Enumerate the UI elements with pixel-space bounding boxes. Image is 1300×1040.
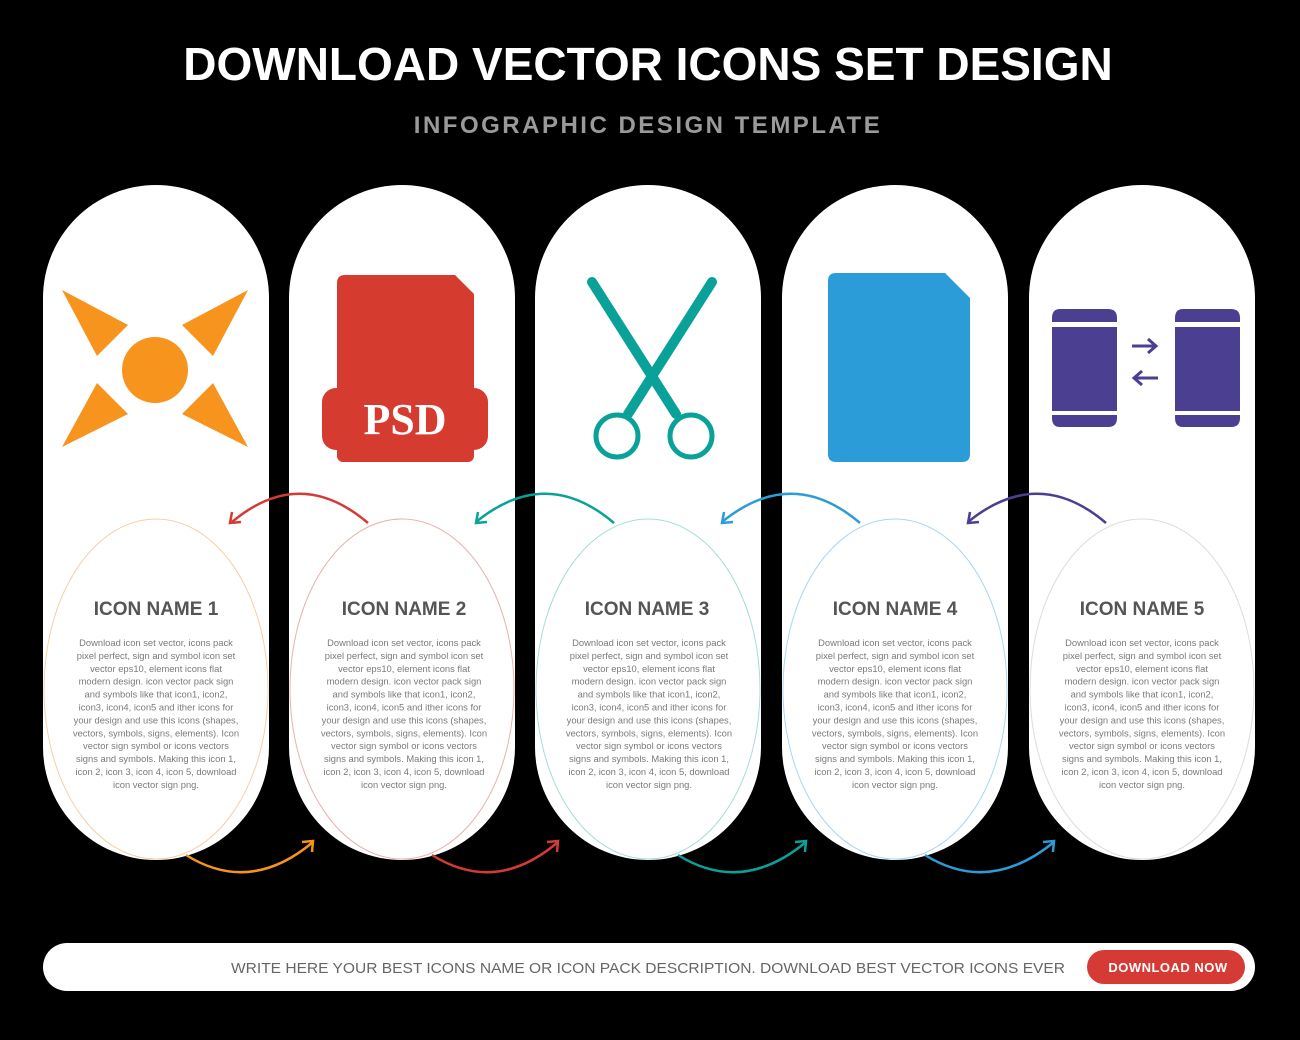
text block 1: your design and use this icons (shapes, [74, 714, 238, 725]
text block 2: ICON NAME 2 [342, 599, 466, 620]
text block 4: and symbols like that icon1, icon2, [824, 689, 966, 700]
text block 3: vector sign symbol or icons vectors [576, 740, 722, 751]
text block 2: pixel perfect, sign and symbol icon set [325, 650, 484, 661]
text block 1: vector sign symbol or icons vectors [83, 740, 229, 751]
panel: card 3 [535, 185, 761, 860]
text block 4 [812, 599, 978, 790]
text block 4: signs and symbols. Making this icon 1, [815, 753, 975, 764]
text block 3: vectors, symbols, signs, elements). Icon [566, 727, 732, 738]
text block 5: and symbols like that icon1, icon2, [1071, 689, 1213, 700]
text block 4: pixel perfect, sign and symbol icon set [816, 650, 975, 661]
icon: scissors [592, 282, 712, 457]
text block 2: icon3, icon4, icon5 and ither icons for [327, 702, 481, 712]
arrow: top red 2 to 1 [230, 494, 368, 523]
text block 5: icon 2, icon 3, icon 4, icon 5, download [1061, 766, 1223, 777]
icon: PSD file [322, 275, 488, 462]
text block 2: vector eps10, element icons flat [338, 663, 470, 674]
text block 1: vectors, symbols, signs, elements). Icon [73, 727, 239, 738]
text block 1: and symbols like that icon1, icon2, [85, 689, 227, 700]
ellipse outline 4 [783, 519, 1007, 859]
text block 5: vector eps10, element icons flat [1076, 663, 1208, 674]
subtitle: INFOGRAPHIC DESIGN TEMPLATE [414, 112, 882, 139]
text block 2 [321, 599, 487, 790]
ellipse outline 5 [1030, 519, 1254, 859]
text block 2: modern design. icon vector pack sign [327, 676, 481, 687]
text block 1 [73, 599, 239, 790]
text block 5: icon3, icon4, icon5 and ither icons for [1065, 702, 1219, 712]
footer bar [43, 943, 1255, 991]
text block 3: vector eps10, element icons flat [583, 663, 715, 674]
text block 1: pixel perfect, sign and symbol icon set [77, 650, 236, 661]
footer text: WRITE HERE YOUR BEST ICONS NAME OR ICON PACK DESCRIPTION. DOWNLOAD BEST VECTOR ICONS EVER [231, 960, 1065, 977]
text block 5 [1059, 599, 1225, 790]
text block 1: icon 2, icon 3, icon 4, icon 5, download [75, 766, 237, 777]
button: download now [1087, 950, 1245, 984]
text block 1: icon3, icon4, icon5 and ither icons for [79, 702, 233, 712]
arrow: top purple 5 to 4 [968, 494, 1106, 523]
icon: blue document [828, 273, 970, 462]
text block 3: icon3, icon4, icon5 and ither icons for [572, 702, 726, 712]
arrow: bottom orange 1 to 2 [186, 841, 313, 872]
text block 1: signs and symbols. Making this icon 1, [76, 753, 236, 764]
text block 5: modern design. icon vector pack sign [1065, 676, 1219, 687]
text block 2: vector sign symbol or icons vectors [331, 740, 477, 751]
text block 4: modern design. icon vector pack sign [818, 676, 972, 687]
text block 2: your design and use this icons (shapes, [322, 714, 486, 725]
arrow: top teal 3 to 2 [476, 494, 614, 523]
text block 4: vector sign symbol or icons vectors [822, 740, 968, 751]
text block 5: signs and symbols. Making this icon 1, [1062, 753, 1222, 764]
title: DOWNLOAD VECTOR ICONS SET DESIGN [183, 38, 1113, 90]
text block 4: icon 2, icon 3, icon 4, icon 5, download [814, 766, 976, 777]
arrow: bottom blue 4 to 5 [925, 841, 1054, 872]
icon: PSD file: PSD [363, 395, 447, 444]
arrow: bottom red 2 to 3 [432, 841, 558, 872]
arrow: bottom teal 3 to 4 [678, 841, 806, 872]
panel: card 4 [782, 185, 1008, 860]
text block 3: pixel perfect, sign and symbol icon set [570, 650, 729, 661]
text block 1: icon vector sign png. [113, 779, 199, 790]
text block 3: ICON NAME 3 [585, 599, 709, 620]
text block 5: pixel perfect, sign and symbol icon set [1063, 650, 1222, 661]
panel: card 2 [289, 185, 515, 860]
text block 5: vector sign symbol or icons vectors [1069, 740, 1215, 751]
text block 3: Download icon set vector, icons pack [572, 637, 726, 648]
text block 3: modern design. icon vector pack sign [572, 676, 726, 687]
text block 3 [566, 599, 732, 790]
text block 3: icon 2, icon 3, icon 4, icon 5, download [568, 766, 730, 777]
ellipse outline 2 [290, 519, 514, 859]
text block 1: modern design. icon vector pack sign [79, 676, 233, 687]
text block 1: Download icon set vector, icons pack [79, 637, 233, 648]
text block 2: icon 2, icon 3, icon 4, icon 5, download [323, 766, 485, 777]
text block 4: your design and use this icons (shapes, [813, 714, 977, 725]
text block 5: icon vector sign png. [1099, 779, 1185, 790]
text block 4: icon3, icon4, icon5 and ither icons for [818, 702, 972, 712]
icon: phones transfer [1052, 309, 1240, 427]
button: download now: DOWNLOAD NOW [1108, 960, 1228, 975]
text block 1: vector eps10, element icons flat [90, 663, 222, 674]
text block 2: and symbols like that icon1, icon2, [333, 689, 475, 700]
text block 1: ICON NAME 1 [94, 599, 219, 620]
text block 2: icon vector sign png. [361, 779, 447, 790]
panel: card 5 [1029, 185, 1255, 860]
text block 2: signs and symbols. Making this icon 1, [324, 753, 484, 764]
text block 3: and symbols like that icon1, icon2, [578, 689, 720, 700]
text block 3: your design and use this icons (shapes, [567, 714, 731, 725]
text block 4: vectors, symbols, signs, elements). Icon [812, 727, 978, 738]
text block 4: vector eps10, element icons flat [829, 663, 961, 674]
text block 5: your design and use this icons (shapes, [1060, 714, 1224, 725]
text block 4: Download icon set vector, icons pack [818, 637, 972, 648]
ellipse outline 3 [536, 519, 760, 859]
text block 5: vectors, symbols, signs, elements). Icon [1059, 727, 1225, 738]
text block 4: icon vector sign png. [852, 779, 938, 790]
text block 4: ICON NAME 4 [833, 599, 958, 620]
icon: orange expand [62, 290, 248, 447]
arrow: top blue 4 to 3 [722, 494, 860, 523]
text block 5: ICON NAME 5 [1080, 599, 1205, 620]
text block 2: Download icon set vector, icons pack [327, 637, 481, 648]
text block 5: Download icon set vector, icons pack [1065, 637, 1219, 648]
text block 3: icon vector sign png. [606, 779, 692, 790]
text block 3: signs and symbols. Making this icon 1, [569, 753, 729, 764]
ellipse outline 1 [44, 519, 268, 859]
text block 2: vectors, symbols, signs, elements). Icon [321, 727, 487, 738]
panel: card 1 [43, 185, 269, 860]
